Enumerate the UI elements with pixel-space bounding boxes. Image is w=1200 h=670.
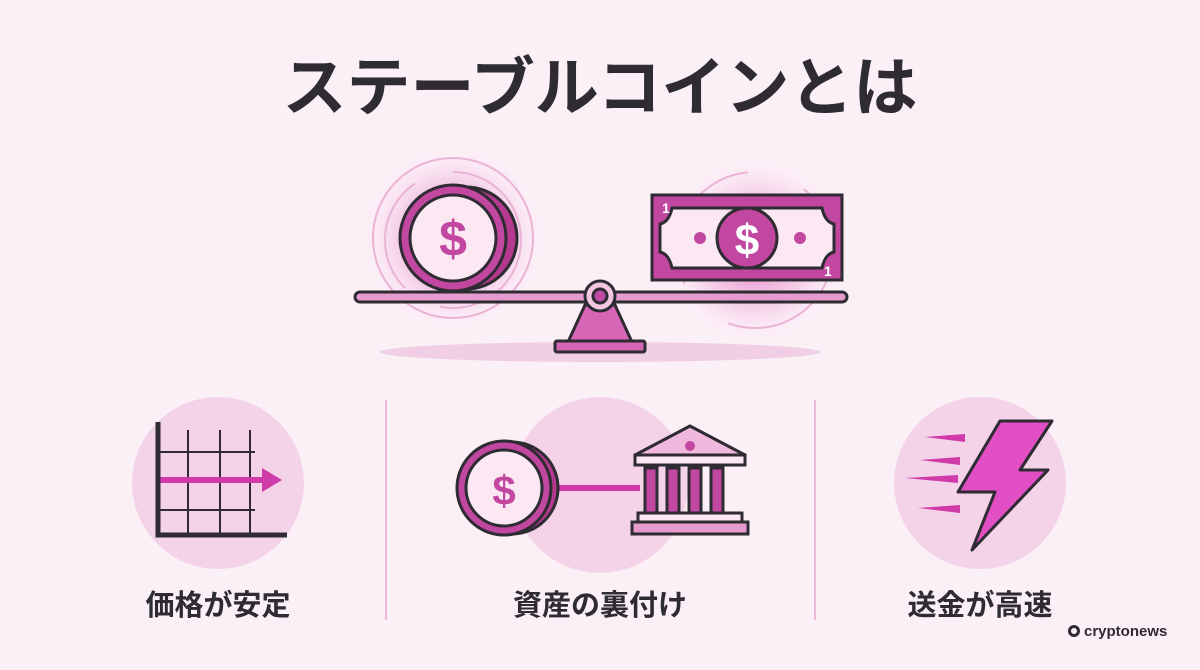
label 2: 資産の裏付け [513,590,687,622]
icon: stable chart [132,397,304,569]
icon: lightning [894,397,1066,569]
shadow [380,342,820,362]
bill [652,195,842,280]
label 3: 送金が高速 [907,590,1052,622]
coin [400,185,517,291]
label 1: 価格が安定 [145,590,290,622]
dividers [385,400,387,620]
bill: $ [735,216,759,265]
bill: 1 [662,200,670,216]
beam & stand [355,281,847,352]
bill: 1 [824,263,832,279]
logo: cryptonews [1084,623,1167,640]
glow right [665,160,845,340]
icon: asset backing: $ [492,467,516,514]
icon: asset backing [457,397,748,573]
title: ステーブルコインとは [283,52,917,124]
coin: $ [439,211,467,267]
glow left [363,148,543,328]
